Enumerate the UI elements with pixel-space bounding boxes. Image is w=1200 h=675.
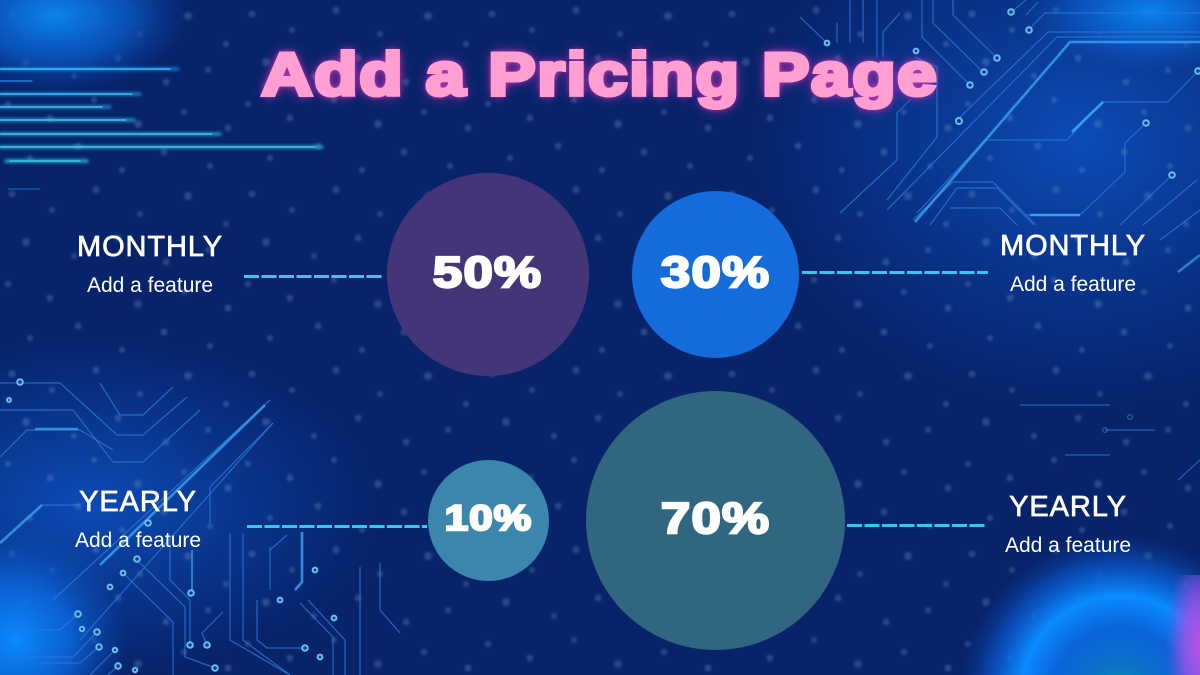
circle: 70%: 70% <box>661 494 770 543</box>
circuit traces bottom-left <box>0 383 400 675</box>
connector: top-right <box>802 271 988 274</box>
connector: bottom-right <box>847 524 987 527</box>
circle: 10%: 10% <box>445 499 532 538</box>
circuit traces top-right <box>800 0 1200 240</box>
circle: 50% <box>387 173 589 376</box>
circle: 10% <box>428 460 549 581</box>
label: top-right monthly <box>1000 230 1146 296</box>
label: bottom-left yearly: Add a feature <box>75 529 201 552</box>
label: bottom-left yearly <box>75 486 201 552</box>
circle: 50%: 50% <box>433 248 543 297</box>
connector: top-left <box>244 275 384 278</box>
label: top-left monthly <box>77 231 223 297</box>
label: top-right monthly: Add a feature <box>1010 273 1136 296</box>
circle: 70% <box>586 391 845 650</box>
label: bottom-right yearly: YEARLY <box>1009 491 1127 523</box>
label: bottom-right yearly: Add a feature <box>1005 534 1131 557</box>
circle: 30% <box>632 191 799 358</box>
connector: bottom-left <box>247 525 427 528</box>
faint traces right-bottom <box>1020 405 1200 480</box>
top-left light streaks <box>0 69 322 189</box>
label: top-left monthly: MONTHLY <box>77 231 223 263</box>
label: top-left monthly: Add a feature <box>87 274 213 297</box>
label: bottom-right yearly <box>1005 491 1131 557</box>
label: bottom-left yearly: YEARLY <box>79 486 197 518</box>
title: Add a Pricing Page <box>261 41 939 108</box>
label: top-right monthly: MONTHLY <box>1000 230 1146 262</box>
bottom-right glow <box>960 535 1200 675</box>
circle: 30%: 30% <box>661 248 770 297</box>
